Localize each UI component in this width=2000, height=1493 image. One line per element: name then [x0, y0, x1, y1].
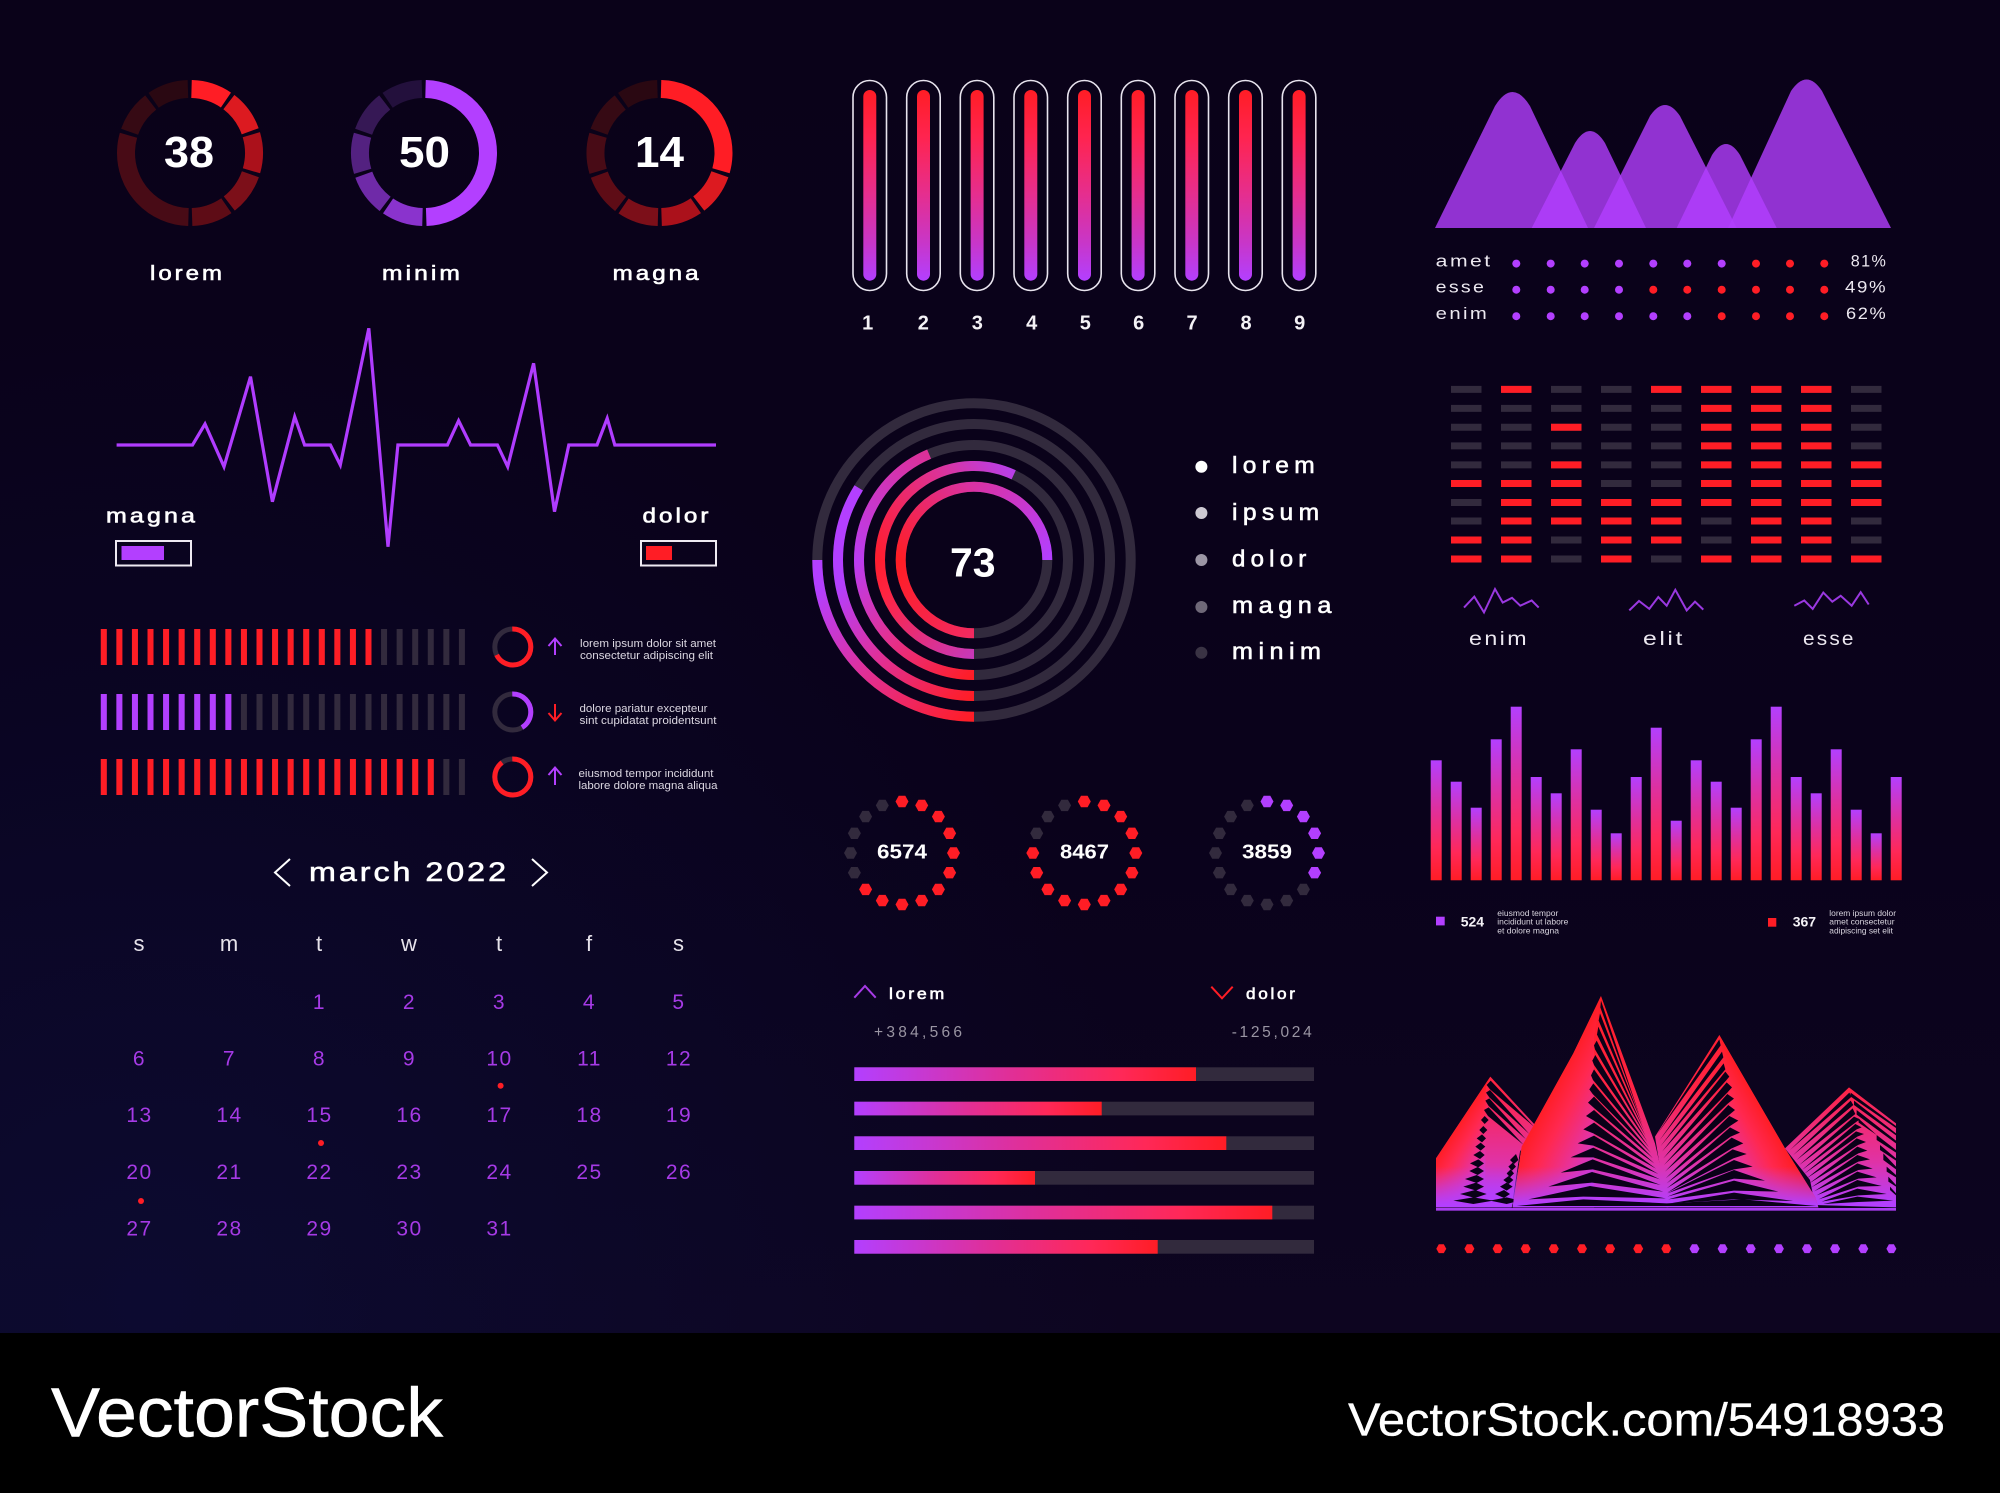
- dot ring: 6574: 6574: [877, 841, 928, 864]
- legend: 367: lorem ipsum dolor: [1829, 908, 1896, 918]
- sparkline: enim: [1464, 589, 1539, 650]
- blended line mountains chart: [1436, 996, 1896, 1211]
- calendar days: 15: [306, 1104, 333, 1127]
- weekday labels: [134, 931, 684, 956]
- gauge: 38 lorem: [100, 63, 280, 285]
- dot ring: 8467: 8467: [1060, 841, 1109, 864]
- calendar days: 14: [216, 1104, 243, 1127]
- calendar days: 13: [126, 1104, 153, 1127]
- weekday labels: s: [134, 931, 144, 956]
- tick bar row 1: [101, 629, 472, 665]
- calendar days: 25: [576, 1161, 603, 1184]
- calendar days: 16: [396, 1104, 423, 1127]
- table percentages: 81%: [1851, 251, 1887, 270]
- gauge: 14 magna: [570, 63, 749, 285]
- stat row 1: ring, arrow, text: consectetur adipiscing elit: [580, 650, 713, 662]
- radial legend: [1195, 452, 1337, 664]
- calendar days: 12: [666, 1048, 692, 1071]
- calendar days: 29: [306, 1218, 333, 1241]
- calendar days: 18: [576, 1104, 603, 1127]
- dot ring: 3859: [1209, 796, 1325, 910]
- calendar days: 27: [126, 1218, 153, 1241]
- capsule numbers: 8: [1240, 312, 1252, 334]
- radial tracks: [817, 403, 1131, 717]
- capsule numbers: 7: [1186, 312, 1198, 334]
- gauge: 50 minim: [334, 63, 514, 285]
- legend: 524: et dolore magna: [1497, 926, 1559, 936]
- calendar days: 6: [133, 1048, 146, 1071]
- calendar days: 5: [672, 991, 686, 1014]
- table labels: amet: [1436, 251, 1493, 270]
- calendar days: 3: [493, 991, 506, 1014]
- dot table: amet esse enim: [1436, 251, 1887, 323]
- sparkline: elit: [1629, 590, 1703, 650]
- trend: lorem up: [854, 986, 962, 1041]
- calendar days: 2: [403, 991, 416, 1014]
- capsule numbers: 5: [1080, 312, 1091, 334]
- gauge: 38 lorem: lorem: [150, 263, 225, 285]
- calendar days: 26: [666, 1161, 692, 1184]
- indicator: magna: magna: [106, 506, 198, 528]
- mountain C: [1655, 1035, 1818, 1207]
- calendar days: 21: [216, 1161, 243, 1184]
- calendar days: 7: [223, 1048, 236, 1071]
- dot ring: 6574: [844, 796, 960, 910]
- calendar days: 8: [313, 1048, 326, 1071]
- calendar days: 4: [583, 991, 596, 1014]
- sparkline: elit: elit: [1643, 629, 1685, 650]
- legend: 367: amet consectetur: [1829, 917, 1895, 927]
- trend: lorem up: lorem: [889, 986, 947, 1003]
- watermark footer: VectorStock.com/54918933: [1348, 1394, 1945, 1446]
- capsule numbers: 9: [1294, 312, 1305, 334]
- stat row 2: ring, arrow, text: [495, 694, 716, 730]
- calendar days: 31: [486, 1218, 513, 1241]
- step dots row: [1436, 1244, 1896, 1253]
- calendar days: 30: [396, 1218, 423, 1241]
- calendar days: 20: [126, 1161, 153, 1184]
- mountain B: [1513, 996, 1817, 1207]
- capsule numbers: 1: [862, 312, 873, 334]
- equalizer grid: [1451, 389, 1882, 559]
- mountain A: [1436, 1077, 1536, 1207]
- sparkline: esse: esse: [1803, 629, 1856, 650]
- legend: 524: [1436, 908, 1569, 936]
- trend: lorem up: +384,566: [874, 1024, 962, 1041]
- capsule numbers: [862, 312, 1305, 334]
- capsule numbers: 3: [972, 312, 983, 334]
- capsule meters 1 to 9: [853, 80, 1316, 334]
- legend: 367: [1768, 908, 1896, 936]
- radial progress arcs: [817, 454, 1047, 717]
- calendar days: 19: [666, 1104, 692, 1127]
- mountain area chart: [1435, 80, 1891, 228]
- stat row 3: ring, arrow, text: eiusmod tempor incididunt: [578, 768, 714, 780]
- calendar days: 24: [486, 1161, 513, 1184]
- sparkline: enim: enim: [1469, 629, 1529, 650]
- mountain D: [1785, 1087, 1896, 1207]
- calendar days: 11: [577, 1048, 602, 1071]
- capsule numbers: 6: [1133, 312, 1144, 334]
- bar tracks: [854, 1067, 1314, 1254]
- calendar: [126, 857, 692, 1241]
- dot ring: 3859: 3859: [1242, 841, 1292, 864]
- calendar days: 9: [403, 1048, 416, 1071]
- radial legend: dolor: [1232, 546, 1312, 572]
- concentric radial chart: 73: 73: [950, 540, 996, 586]
- stat row 1: ring, arrow, text: [495, 629, 716, 665]
- calendar days: [126, 991, 692, 1241]
- weekday labels: t: [316, 931, 322, 956]
- radial legend: minim: [1232, 638, 1326, 664]
- table labels: enim: [1436, 304, 1489, 323]
- calendar days: 17: [486, 1104, 513, 1127]
- legend: 524: incididunt ut labore: [1497, 917, 1569, 927]
- heartbeat line chart: [117, 328, 716, 547]
- capsule fills: [863, 90, 1306, 281]
- indicator: dolor: dolor: [642, 506, 712, 528]
- capsule outlines: [853, 80, 1316, 290]
- table labels: esse: [1436, 278, 1486, 296]
- dot ring: 8467: [1026, 796, 1142, 910]
- table percentages: 49%: [1845, 278, 1887, 296]
- table labels: [1436, 251, 1493, 323]
- capsule numbers: 4: [1026, 312, 1038, 334]
- stat row 1: ring, arrow, text: lorem ipsum dolor sit amet: [580, 638, 716, 650]
- calendar days: 23: [396, 1161, 423, 1184]
- radial legend: magna: [1232, 592, 1337, 618]
- table percentages: [1845, 251, 1887, 323]
- gauge: 14 magna: magna: [613, 263, 702, 285]
- calendar days: 1: [313, 991, 326, 1014]
- calendar days: 22: [306, 1161, 333, 1184]
- watermark footer: [0, 1333, 2000, 1493]
- trend: dolor down: dolor: [1246, 986, 1298, 1003]
- stat row 2: ring, arrow, text: sint cupidatat proidentsunt: [580, 715, 716, 727]
- gauge: 14 magna: 14: [635, 128, 684, 177]
- indicator: dolor: [641, 506, 716, 566]
- trend: dolor down: [1211, 986, 1312, 1041]
- gauge: 50 minim: 50: [399, 128, 450, 177]
- weekday labels: m: [220, 931, 238, 956]
- calendar days: 28: [216, 1218, 243, 1241]
- gauge: 38 lorem: 38: [164, 128, 214, 177]
- sparkline: esse: [1794, 592, 1869, 650]
- legend: 367: adipiscing set elit: [1829, 926, 1894, 936]
- capsule numbers: 2: [918, 312, 929, 334]
- legend: 524: eiusmod tempor: [1497, 908, 1558, 918]
- radial legend: lorem: [1232, 452, 1320, 478]
- table dots: [1512, 260, 1828, 320]
- gauge: 50 minim: minim: [382, 263, 463, 285]
- weekday labels: w: [400, 931, 417, 956]
- calendar days: 10: [486, 1048, 513, 1071]
- trend: dolor down: -125,024: [1232, 1024, 1312, 1041]
- mountains baseline: [1436, 1208, 1896, 1211]
- concentric radial chart: 73: [817, 403, 1131, 717]
- weekday labels: s: [673, 931, 684, 956]
- calendar header: march 2022: [309, 857, 509, 887]
- stat row 3: ring, arrow, text: [495, 759, 718, 795]
- stat row 3: ring, arrow, text: labore dolore magna aliqua: [578, 780, 718, 792]
- tick bar row 3: [101, 759, 472, 795]
- weekday labels: f: [586, 931, 593, 956]
- table percentages: 62%: [1846, 304, 1887, 323]
- calendar event dots: [138, 1083, 504, 1204]
- bar fills: [854, 1067, 1272, 1254]
- watermark footer: VectorStock: [51, 1374, 444, 1452]
- gradient bar chart: [1431, 707, 1902, 880]
- radial legend: ipsum: [1232, 499, 1324, 525]
- indicator: magna: [106, 506, 198, 566]
- tick bar row 2: [101, 694, 472, 730]
- legend: 524: 524: [1461, 914, 1484, 930]
- stat row 2: ring, arrow, text: dolore pariatur excepteur: [580, 703, 708, 715]
- legend: 367: 367: [1793, 914, 1816, 930]
- calendar header: [275, 857, 547, 887]
- weekday labels: t: [496, 931, 502, 956]
- horizontal progress bars: [854, 1067, 1314, 1254]
